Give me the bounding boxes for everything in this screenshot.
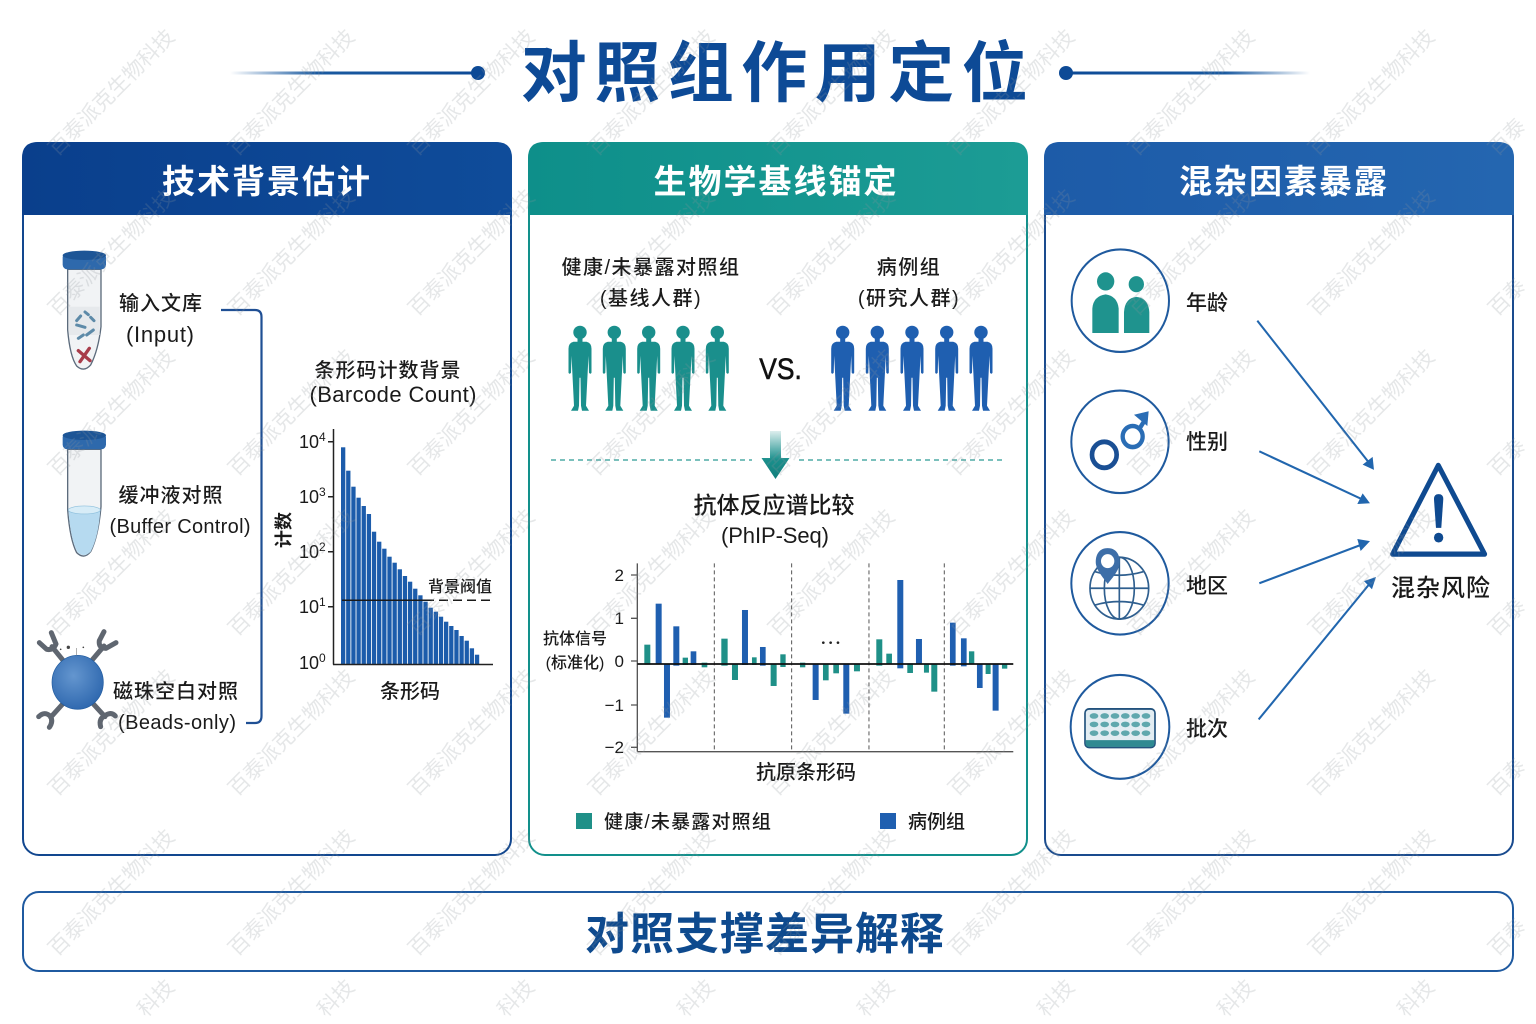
y tick labels: 2 — [319, 540, 326, 554]
label: gender: 性别 — [1186, 431, 1228, 454]
chart title: barcode count: 条形码计数背景 — [314, 359, 462, 382]
watermark: 百泰派克生物科技 — [224, 505, 359, 641]
watermark: 百泰派克生物科技 — [1304, 345, 1439, 481]
watermark: 百泰派克生物科技 — [944, 345, 1079, 481]
watermark: 百泰派克生物科技 — [764, 665, 899, 801]
icon: magnetic bead — [39, 632, 116, 727]
icon: case group people — [831, 326, 992, 411]
label: region: 地区 — [1186, 575, 1228, 598]
watermark: 百泰派克生物科技 — [1304, 665, 1439, 801]
watermark: 百泰派克生物科技 — [1304, 825, 1439, 961]
watermark: 百泰派克生物科技 — [404, 25, 539, 161]
icon: buffer control tube — [63, 431, 106, 556]
panel header: biological baseline — [528, 142, 1028, 215]
chart title: barcode count: (Barcode Count) — [310, 382, 476, 407]
label: batch: 批次 — [1186, 718, 1228, 741]
x axis label: 条形码 — [380, 680, 440, 703]
chart title: antibody comparison — [694, 492, 854, 548]
bar chart: antibody signal — [631, 563, 1013, 752]
ellipsis — [822, 641, 839, 644]
watermark: 百泰派克生物科技 — [44, 25, 179, 161]
watermark: 百泰派克生物科技 — [1304, 505, 1439, 641]
y tick labels — [299, 430, 326, 673]
label: control group: 健康/未暴露对照组 — [561, 256, 741, 279]
watermark: 百泰派克生物科技 — [1124, 185, 1259, 321]
panel: biological baseline — [528, 142, 1028, 855]
panel: confounding exposure — [1044, 142, 1514, 855]
y tick labels: 10 — [299, 597, 319, 617]
watermark: 科技 — [1033, 976, 1079, 1022]
banner: control supports differential interpretation: 对照支撑差异解释 — [585, 910, 945, 959]
watermark: 百泰 — [1484, 915, 1530, 961]
watermark: 百泰派克生物科技 — [1124, 25, 1259, 161]
banner: control supports differential interpretation — [23, 892, 1513, 971]
watermark: 百泰派克生物科技 — [1124, 345, 1259, 481]
y axis label: antibody signal: 抗体信号 — [543, 629, 607, 648]
watermark: 百泰派克生物科技 — [44, 505, 179, 641]
watermark: 科技 — [1213, 976, 1259, 1022]
watermark: 百泰派克生物科技 — [1124, 505, 1259, 641]
arrow: down — [762, 431, 790, 479]
label: buffer control: 缓冲液对照 — [118, 484, 224, 507]
chart title: barcode count — [310, 359, 476, 407]
label: age: 年龄 — [1186, 292, 1228, 315]
y axis label: antibody signal — [543, 629, 607, 672]
label: beads only: 磁珠空白对照 — [113, 680, 239, 703]
y tick labels: antibody signal: −1 — [605, 696, 624, 715]
threshold label: 背景阀值 — [428, 578, 492, 596]
watermark: 百泰派克生物科技 — [1124, 825, 1259, 961]
panel header: technical background: 技术背景估计 — [162, 163, 372, 200]
watermark: 百泰 — [1484, 595, 1530, 641]
title — [230, 36, 1310, 110]
watermark: 百泰派克生物科技 — [584, 345, 719, 481]
label: case group: 病例组 — [877, 256, 941, 279]
watermark: 百泰派克生物科技 — [404, 345, 539, 481]
y tick labels: 0 — [319, 651, 326, 665]
legend — [576, 811, 965, 833]
watermark: 百泰派克生物科技 — [1304, 25, 1439, 161]
label: versus: VS. — [759, 351, 802, 385]
label: control group — [561, 256, 741, 310]
watermark: 百泰派克生物科技 — [764, 345, 899, 481]
y tick labels: 10 — [299, 542, 319, 562]
watermark: 百泰 — [1484, 435, 1530, 481]
bracket — [221, 310, 262, 723]
watermark: 百泰派克生物科技 — [944, 505, 1079, 641]
y tick labels: 10 — [299, 653, 319, 673]
x axis label: antigen barcode: 抗原条形码 — [756, 761, 856, 784]
legend: 病例组 — [908, 811, 965, 833]
watermark: 百泰派克生物科技 — [764, 25, 899, 161]
threshold line — [342, 599, 490, 601]
bar chart: barcode count — [274, 429, 493, 703]
label: case group: (研究人群) — [858, 287, 960, 310]
panel header: confounding exposure — [1044, 142, 1514, 215]
zero line — [637, 661, 1013, 666]
axes — [631, 563, 1013, 752]
y tick labels: antibody signal: 1 — [615, 609, 624, 628]
label: confounding risk: 混杂风险 — [1391, 575, 1491, 602]
icon: gender — [1071, 391, 1169, 493]
icon: warning triangle — [1393, 465, 1485, 554]
chart title: antibody comparison: (PhIP-Seq) — [721, 523, 829, 548]
watermark: 百泰派克生物科技 — [944, 665, 1079, 801]
watermark: 百泰派克生物科技 — [44, 345, 179, 481]
watermark: 百泰派克生物科技 — [404, 185, 539, 321]
y tick labels: antibody signal: 0 — [615, 652, 624, 671]
watermark: 百泰派克生物科技 — [224, 345, 359, 481]
watermark: 百泰派克生物科技 — [1124, 665, 1259, 801]
arrows: factors to risk — [1257, 321, 1376, 719]
panel: technical background estimate — [22, 142, 512, 855]
watermark: 科技 — [1393, 976, 1439, 1022]
watermark: 百泰派克生物科技 — [584, 825, 719, 961]
watermark: 科技 — [493, 976, 539, 1022]
watermark: 科技 — [133, 976, 179, 1022]
watermark: 百泰派克生物科技 — [764, 505, 899, 641]
label: beads only — [113, 680, 239, 734]
icon: control group people — [568, 326, 729, 411]
label: control group: (基线人群) — [600, 287, 702, 310]
y tick labels: 4 — [319, 430, 326, 444]
watermark: 百泰派克生物科技 — [584, 185, 719, 321]
watermark: 百泰派克生物科技 — [44, 825, 179, 961]
watermark: 百泰派克生物科技 — [584, 505, 719, 641]
y tick labels: antibody signal: −2 — [605, 738, 624, 757]
watermark: 百泰派克生物科技 — [944, 25, 1079, 161]
label: buffer control — [110, 484, 250, 538]
y axis label: antibody signal: (标准化) — [546, 654, 604, 672]
watermark: 百泰派克生物科技 — [224, 25, 359, 161]
watermark: 百泰派克生物科技 — [224, 825, 359, 961]
watermark: 百泰派克生物科技 — [944, 825, 1079, 961]
panel header: technical background — [22, 142, 512, 215]
watermark: 百泰 — [1484, 275, 1530, 321]
title: 对照组作用定位 — [521, 36, 1035, 110]
watermark: 百泰 — [1484, 115, 1530, 161]
watermark: 百泰派克生物科技 — [44, 665, 179, 801]
bars — [341, 447, 479, 664]
watermark: 百泰 — [1484, 755, 1530, 801]
panel header: biological baseline: 生物学基线锚定 — [654, 163, 898, 200]
watermark: 百泰派克生物科技 — [584, 25, 719, 161]
label: buffer control: (Buffer Control) — [110, 516, 250, 538]
label: input library: (Input) — [126, 322, 194, 347]
label: beads only: (Beads-only) — [118, 712, 236, 734]
group dividers — [714, 563, 944, 752]
watermark: 科技 — [853, 976, 899, 1022]
y axis label: 计数 — [274, 512, 294, 548]
y tick labels: 3 — [319, 485, 326, 499]
axes — [328, 429, 493, 664]
legend: 健康/未暴露对照组 — [604, 811, 772, 833]
case bars — [656, 580, 999, 718]
icon: region — [1071, 532, 1169, 635]
y tick labels: antibody signal — [605, 566, 624, 757]
watermark: 百泰派克生物科技 — [944, 185, 1079, 321]
watermark: 百泰派克生物科技 — [224, 665, 359, 801]
watermark: 百泰派克生物科技 — [584, 665, 719, 801]
y tick labels: 10 — [299, 432, 319, 452]
watermark: 百泰派克生物科技 — [764, 185, 899, 321]
watermark: 科技 — [313, 976, 359, 1022]
watermark: 百泰派克生物科技 — [1304, 185, 1439, 321]
watermark: 百泰派克生物科技 — [404, 825, 539, 961]
watermark: 百泰派克生物科技 — [404, 505, 539, 641]
y tick labels: 10 — [299, 487, 319, 507]
watermark: 百泰派克生物科技 — [764, 825, 899, 961]
control bars — [644, 639, 1007, 692]
y tick labels: antibody signal: 2 — [615, 566, 624, 585]
icon: batch plate — [1071, 675, 1169, 779]
watermark: 百泰派克生物科技 — [404, 665, 539, 801]
chart title: antibody comparison: 抗体反应谱比较 — [694, 492, 854, 518]
y tick labels: 1 — [319, 595, 326, 609]
watermark: 百泰派克生物科技 — [224, 185, 359, 321]
watermark: 百泰派克生物科技 — [44, 185, 179, 321]
icon: age — [1072, 249, 1169, 352]
icon: input library tube — [63, 251, 106, 369]
label: case group — [858, 256, 960, 310]
label: input library: 输入文库 — [119, 292, 203, 315]
label: input library — [119, 292, 203, 347]
panel header: confounding exposure: 混杂因素暴露 — [1179, 163, 1389, 200]
watermark: 科技 — [673, 976, 719, 1022]
